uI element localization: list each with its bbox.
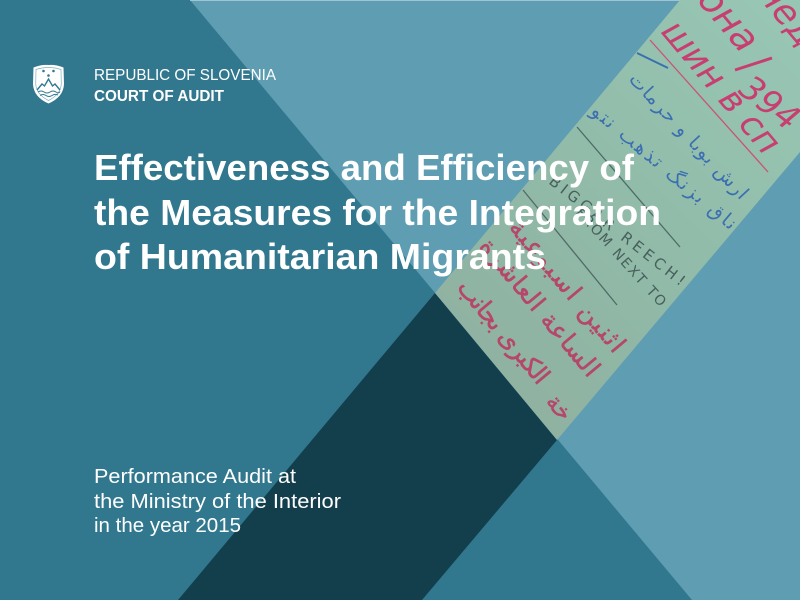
subtitle: Performance Audit at bbox=[94, 465, 296, 488]
organisation name: COURT OF AUDIT bbox=[94, 88, 224, 105]
top edge highlight bbox=[190, 0, 680, 1]
photo: handwritten language notes on diagonal band: اثنين اسبوعية bbox=[503, 213, 632, 358]
organisation name: REPUBLIC OF SLOVENIA bbox=[94, 67, 276, 84]
title: of Humanitarian Migrants bbox=[94, 236, 546, 277]
subtitle bbox=[94, 465, 341, 537]
background: light teal diagonal panel bbox=[190, 0, 800, 600]
subtitle: the Ministry of the Interior bbox=[94, 490, 341, 513]
icon: coat of arms shield bbox=[33, 65, 64, 104]
photo: handwritten language notes on diagonal band: FROM NEXT TO bbox=[572, 205, 669, 310]
title: the Measures for the Integration bbox=[94, 192, 661, 233]
organisation name bbox=[94, 67, 276, 105]
background: dark band segment bbox=[178, 293, 557, 600]
photo: handwritten language notes on diagonal band: خة bbox=[540, 389, 577, 426]
title: Effectiveness and Efficiency of bbox=[94, 147, 635, 188]
photo: handwritten language notes on diagonal band: шин в сп bbox=[653, 12, 788, 162]
subtitle: in the year 2015 bbox=[94, 514, 241, 537]
title bbox=[94, 147, 661, 277]
photo: handwritten language notes on diagonal band: الكبرى بجانب bbox=[451, 273, 556, 390]
photo: handwritten language notes on diagonal band bbox=[420, 0, 800, 450]
photo: handwritten language notes on diagonal band: ناق بزنگ تذهب نتو bbox=[586, 99, 741, 234]
photo: handwritten language notes on diagonal band: ارش بوبا و حرمات bbox=[624, 68, 753, 204]
photo: handwritten language notes on diagonal band: الساعة العاشرة bbox=[473, 232, 606, 383]
photo: handwritten language notes on diagonal band: BIGGAR REECH! bbox=[546, 172, 689, 290]
